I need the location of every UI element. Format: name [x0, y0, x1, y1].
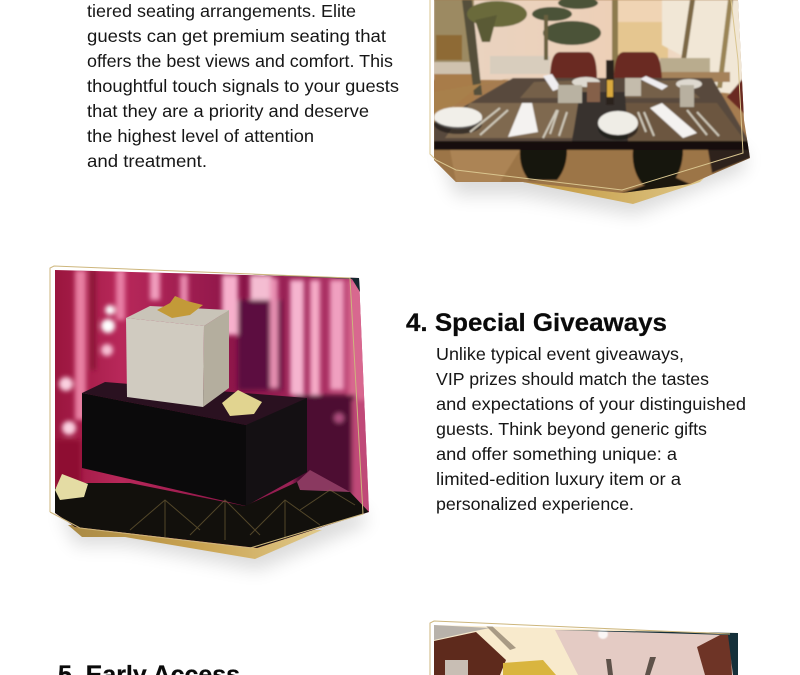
photo panel: hotel interior	[430, 621, 739, 675]
text block: tiered seating: the highest level of attention	[87, 126, 314, 146]
text block: special giveaways	[436, 344, 746, 514]
gold backing: dining photo	[434, 160, 712, 204]
thin gold frame: gift photo	[50, 266, 363, 548]
text block: special giveaways: personalized experience.	[436, 494, 634, 514]
text block: tiered seating: and treatment.	[87, 151, 207, 171]
text block: special giveaways: limited-edition luxury item or a	[436, 469, 681, 489]
text block: special giveaways: and offer something unique: a	[436, 444, 677, 464]
text block: special giveaways: Unlike typical event giveaways,	[436, 344, 684, 364]
photo panel: dining table	[430, 0, 755, 215]
text block: tiered seating: offers the best views and comfort. This	[87, 51, 393, 71]
gift scene	[50, 265, 375, 555]
text block: tiered seating	[87, 1, 399, 171]
black floor with pattern	[55, 470, 369, 548]
text block: tiered seating: tiered seating arrangements. Elite	[87, 1, 356, 21]
text block: special giveaways: guests. Think beyond generic gifts	[436, 419, 707, 439]
dining room scene	[434, 0, 750, 193]
dark corner: gift photo	[240, 274, 360, 292]
text block: tiered seating: thoughtful touch signals to your guests	[87, 76, 399, 96]
text block: tiered seating: guests can get premium seating that	[87, 26, 386, 46]
heading: special giveaways: 4. Special Giveaways	[406, 309, 667, 337]
text block: tiered seating: that they are a priority and deserve	[87, 101, 369, 121]
text block: special giveaways: VIP prizes should match the tastes	[436, 369, 709, 389]
shadow: gift photo	[60, 510, 365, 570]
dark corner: interior photo	[555, 630, 738, 675]
photo panel: gift boxes	[50, 265, 375, 570]
thin gold frame: dining photo	[430, 0, 743, 190]
gold backing: gift photo	[68, 525, 322, 559]
gold bows	[55, 296, 262, 500]
text block: special giveaways: and expectations of your distinguished	[436, 394, 746, 414]
black box	[82, 382, 307, 506]
shadow: dining photo	[440, 150, 745, 215]
interior scene	[434, 625, 739, 675]
silver gift box	[126, 306, 229, 407]
thin gold frame: interior photo	[430, 621, 730, 675]
